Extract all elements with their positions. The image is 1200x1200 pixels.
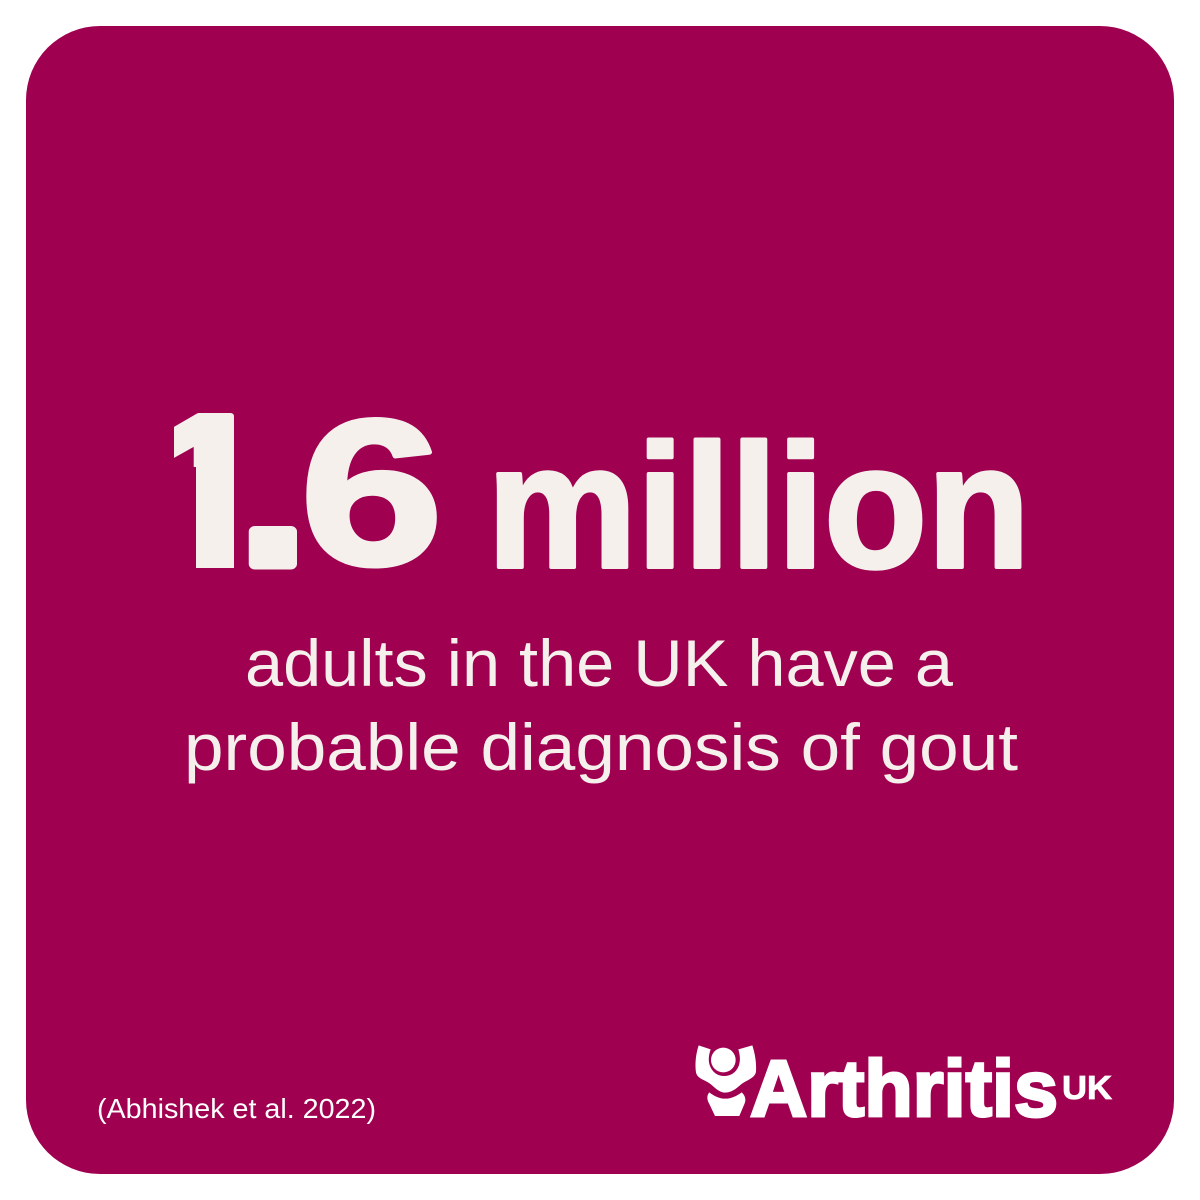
headline statistic: 1.6 million xyxy=(174,413,1022,571)
subheading xyxy=(184,626,1018,784)
subheading line 1: adults in the UK have a xyxy=(245,626,953,700)
subheading line 2: probable diagnosis of gout xyxy=(184,710,1018,784)
figure: 6: 6 xyxy=(300,377,443,608)
wordmark: UK: UK xyxy=(1062,1069,1112,1106)
figure: decimal point: . xyxy=(238,368,308,611)
icon: figure with raised arms xyxy=(695,1045,756,1116)
word: million: million xyxy=(487,409,1030,605)
wordmark: Arthritis: Arthritis xyxy=(750,1044,1058,1133)
source citation: (Abhishek et al. 2022) xyxy=(97,1093,376,1124)
figure: 1: 1 xyxy=(140,370,276,613)
logo: Arthritis UK xyxy=(695,1044,1112,1133)
